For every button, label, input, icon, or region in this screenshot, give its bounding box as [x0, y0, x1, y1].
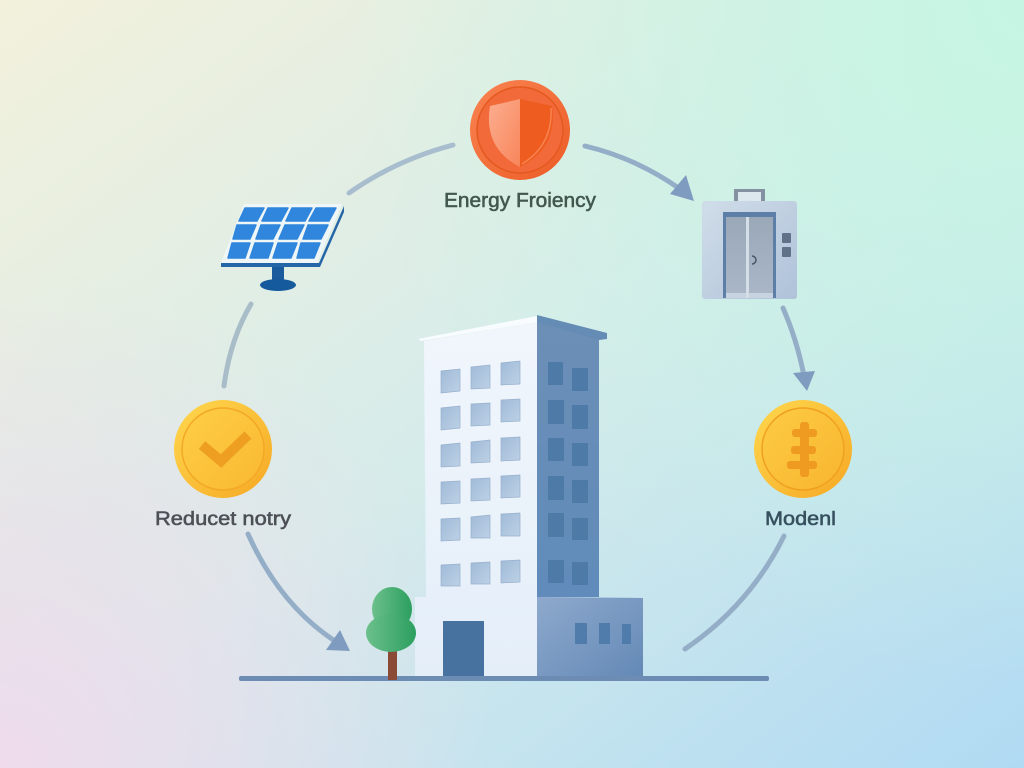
- icon: elevator: [702, 189, 797, 299]
- arrow: reduced coin to building: [248, 534, 350, 651]
- roof: [418, 316, 537, 341]
- building side face: [537, 320, 599, 597]
- arrow: elevator to modern coin: [783, 308, 815, 391]
- label: Energy Froiency: Energy Froiency: [444, 190, 596, 212]
- side windows: [548, 362, 588, 585]
- annex: [537, 597, 643, 677]
- icon: modern coin: [754, 400, 852, 498]
- icon: solar panel: [221, 204, 344, 291]
- arrow: shield to elevator: [585, 146, 694, 201]
- door: [443, 621, 484, 677]
- arrow: solar panel to shield: [349, 145, 453, 193]
- arrow: building to modern coin: [685, 536, 784, 649]
- building front face: [415, 322, 537, 677]
- front windows: [441, 361, 520, 586]
- arrow: coin to solar panel: [224, 304, 251, 386]
- icon: orange shield coin: [470, 80, 570, 180]
- label: Reducet notry: Reducet notry: [155, 509, 292, 530]
- building: [415, 315, 643, 677]
- annex windows: [575, 623, 631, 644]
- icon: tree: [366, 587, 416, 680]
- ground line: [239, 676, 769, 681]
- label: Modenl: Modenl: [765, 509, 836, 530]
- icon: check coin: [174, 400, 272, 498]
- cycle arrows: [224, 145, 815, 651]
